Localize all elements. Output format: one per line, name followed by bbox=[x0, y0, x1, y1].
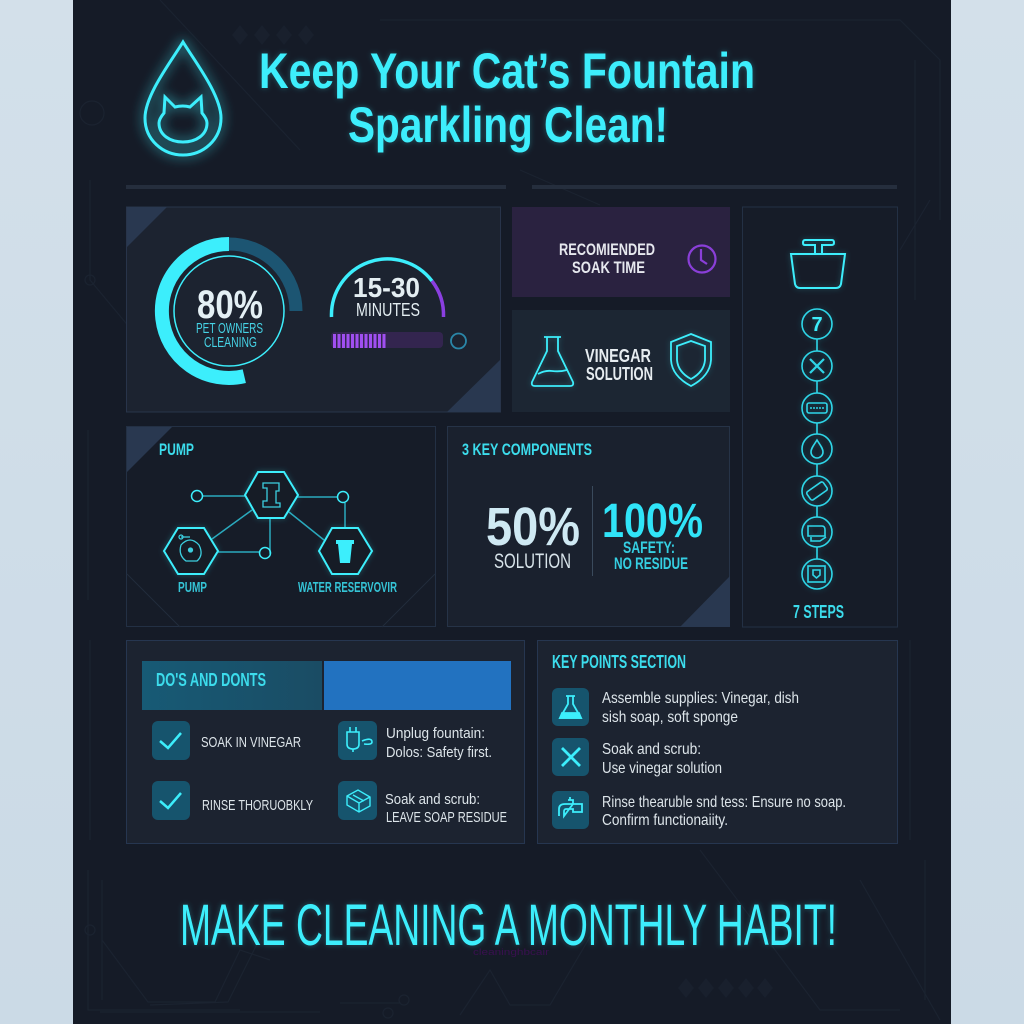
panel: key points: sish soap, soft sponge bbox=[602, 709, 738, 726]
hexagon nodes bbox=[164, 472, 372, 574]
gauge: 15-30 minutes: 15-30 bbox=[353, 272, 420, 303]
title: Keep Your Cat’s Fountain bbox=[259, 43, 755, 99]
panel: do's and don'ts: Unplug fountain: bbox=[386, 725, 485, 742]
panel: key points: Assemble supplies: Vinegar, dish bbox=[602, 690, 799, 707]
panel: recommended soak time: SOAK TIME bbox=[572, 258, 645, 277]
panel: key points: KEY POINTS SECTION bbox=[552, 652, 686, 672]
icon: water drop with cat bbox=[145, 42, 221, 155]
panel: key points: Soak and scrub: bbox=[602, 741, 701, 758]
gauge: 15-30 minutes bbox=[331, 259, 444, 320]
icon boxes bbox=[152, 721, 377, 820]
connector lines bbox=[192, 490, 348, 558]
ring chart: 80 percent: PET OWNERS bbox=[196, 320, 263, 337]
step icons bbox=[802, 309, 832, 589]
panel: recommended soak time bbox=[512, 207, 730, 297]
panel: 3 key components bbox=[448, 426, 730, 627]
stat: 100 percent safety bbox=[602, 495, 703, 573]
stat: 100 percent safety: 100% bbox=[602, 495, 703, 548]
icon: basin bbox=[791, 240, 845, 288]
hexagon icons bbox=[179, 483, 354, 563]
gauge: 15-30 minutes: MINUTES bbox=[356, 300, 420, 320]
panel: recommended soak time: RECOMIENDED bbox=[559, 240, 655, 259]
panel: pump diagram bbox=[126, 426, 436, 627]
stat: 100 percent safety: NO RESIDUE bbox=[614, 554, 688, 573]
icons bbox=[160, 727, 372, 812]
icon: clock bbox=[688, 246, 716, 272]
progress bar bbox=[331, 332, 466, 348]
panel: key points: Rinse thearuble snd tess: Ensure no soap. bbox=[602, 794, 846, 811]
panel: pump diagram: WATER RESERVOVIR bbox=[298, 579, 397, 596]
stat: 50 percent solution: 50% bbox=[486, 497, 580, 557]
panel: do's and don'ts: LEAVE SOAP RESIDUE bbox=[386, 809, 507, 826]
panel: do's and don'ts bbox=[126, 640, 524, 844]
ring chart: 80 percent: 80% bbox=[197, 283, 263, 327]
ring chart: 80 percent bbox=[162, 244, 296, 378]
panel: do's and don'ts: Soak and scrub: bbox=[385, 791, 480, 808]
panel: do's and don'ts: RINSE THORUOBKLY bbox=[202, 797, 313, 814]
panel: pump diagram: PUMP bbox=[159, 440, 194, 459]
icons bbox=[559, 696, 582, 816]
panel: key points: Confirm functionaiity. bbox=[602, 812, 728, 829]
panel: statistics bbox=[126, 207, 500, 412]
panel: vinegar solution bbox=[512, 310, 730, 412]
panel: do's and don'ts: Dolos: Safety first. bbox=[386, 744, 492, 761]
stat: 100 percent safety: SAFETY: bbox=[623, 538, 675, 557]
divider right bbox=[532, 185, 897, 189]
panel: key points: Use vinegar solution bbox=[602, 760, 722, 777]
icon: shield bbox=[671, 334, 711, 386]
header bar teal bbox=[142, 661, 322, 710]
step icons: 7 bbox=[811, 314, 823, 336]
stat: 50 percent solution: SOLUTION bbox=[494, 550, 571, 573]
panel: 3 key components: 3 KEY COMPONENTS bbox=[462, 440, 592, 459]
header bar blue bbox=[324, 661, 511, 710]
panel: pump diagram: PUMP bbox=[178, 579, 207, 596]
title: Sparkling Clean! bbox=[348, 97, 668, 153]
icon boxes bbox=[552, 688, 589, 829]
panel: vinegar solution: VINEGAR bbox=[585, 346, 651, 366]
divider left bbox=[126, 185, 506, 189]
panel: 7 steps bbox=[742, 207, 898, 627]
panel: 7 steps: 7 STEPS bbox=[793, 602, 844, 622]
icon: flask bbox=[532, 337, 573, 386]
ring chart: 80 percent: CLEANING bbox=[204, 334, 257, 351]
panel: vinegar solution: SOLUTION bbox=[586, 364, 653, 384]
title bbox=[259, 43, 755, 153]
panel: do's and don'ts: SOAK IN VINEGAR bbox=[201, 734, 301, 751]
faint stray caption: cleaninghbcair bbox=[473, 947, 549, 957]
panel: do's and don'ts: DO'S AND DONTS bbox=[156, 670, 266, 690]
panel: key points bbox=[538, 640, 898, 844]
